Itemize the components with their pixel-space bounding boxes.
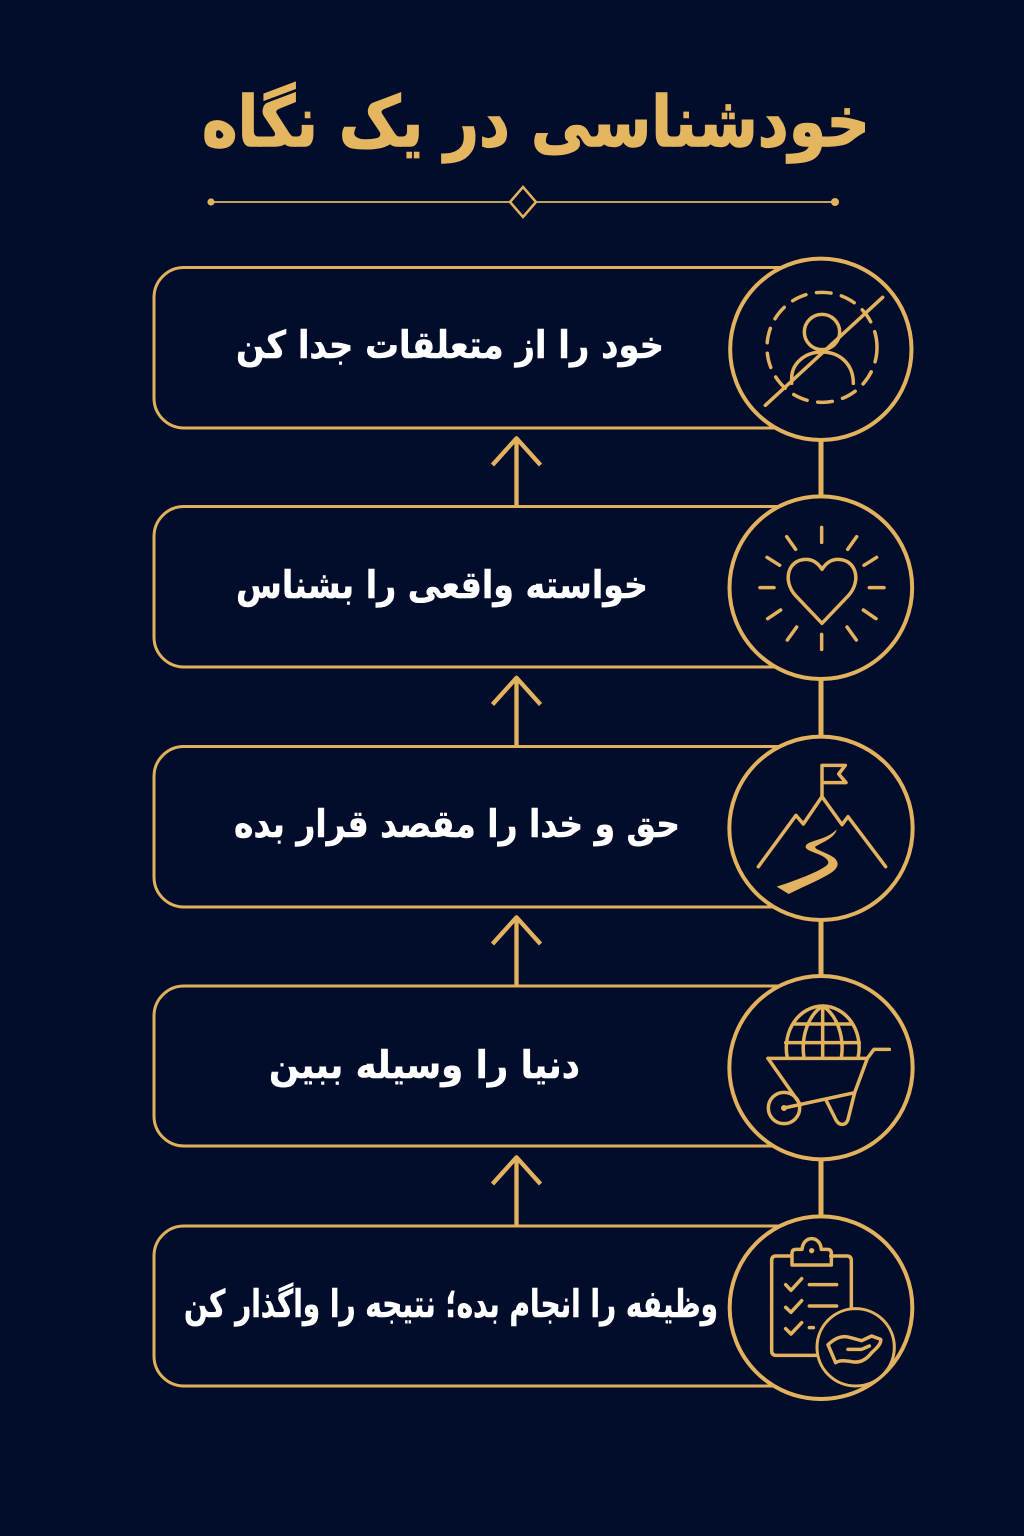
icon: radiant heart [729,496,912,679]
panel: step 1 detach [154,259,911,440]
step 4 text: دنیا را وسیله ببین [269,1043,580,1088]
arrow: step 4 to step 3 [493,917,540,985]
arrow: step 3 to step 2 [493,678,540,745]
step 2 text: خواسته واقعی را بشناس [236,563,648,608]
panel: step 2 real desire [154,496,912,679]
panel: step 4 world as means [154,976,913,1159]
icon: mountain with flag [729,737,913,920]
panel: step 5 duty and result [154,1216,912,1399]
connector line between icons [818,438,824,1218]
panel: step 3 truth as goal [154,737,913,920]
icon: globe in wheelbarrow [729,976,913,1159]
step 5 text: وظیفه را انجام بده؛ نتیجه را واگذار کن [184,1282,718,1327]
step 3 text: حق و خدا را مقصد قرار بده [234,802,680,847]
step 1 text: خود را از متعلقات جدا کن [236,323,664,367]
icon: crossed person [730,259,911,440]
icon: clipboard and hand [730,1216,912,1399]
title divider ornament [207,187,839,217]
arrow: step 2 to step 1 [493,438,540,506]
arrow: step 5 to step 4 [493,1157,540,1225]
title: خودشناسی در یک نگاه [202,81,870,163]
